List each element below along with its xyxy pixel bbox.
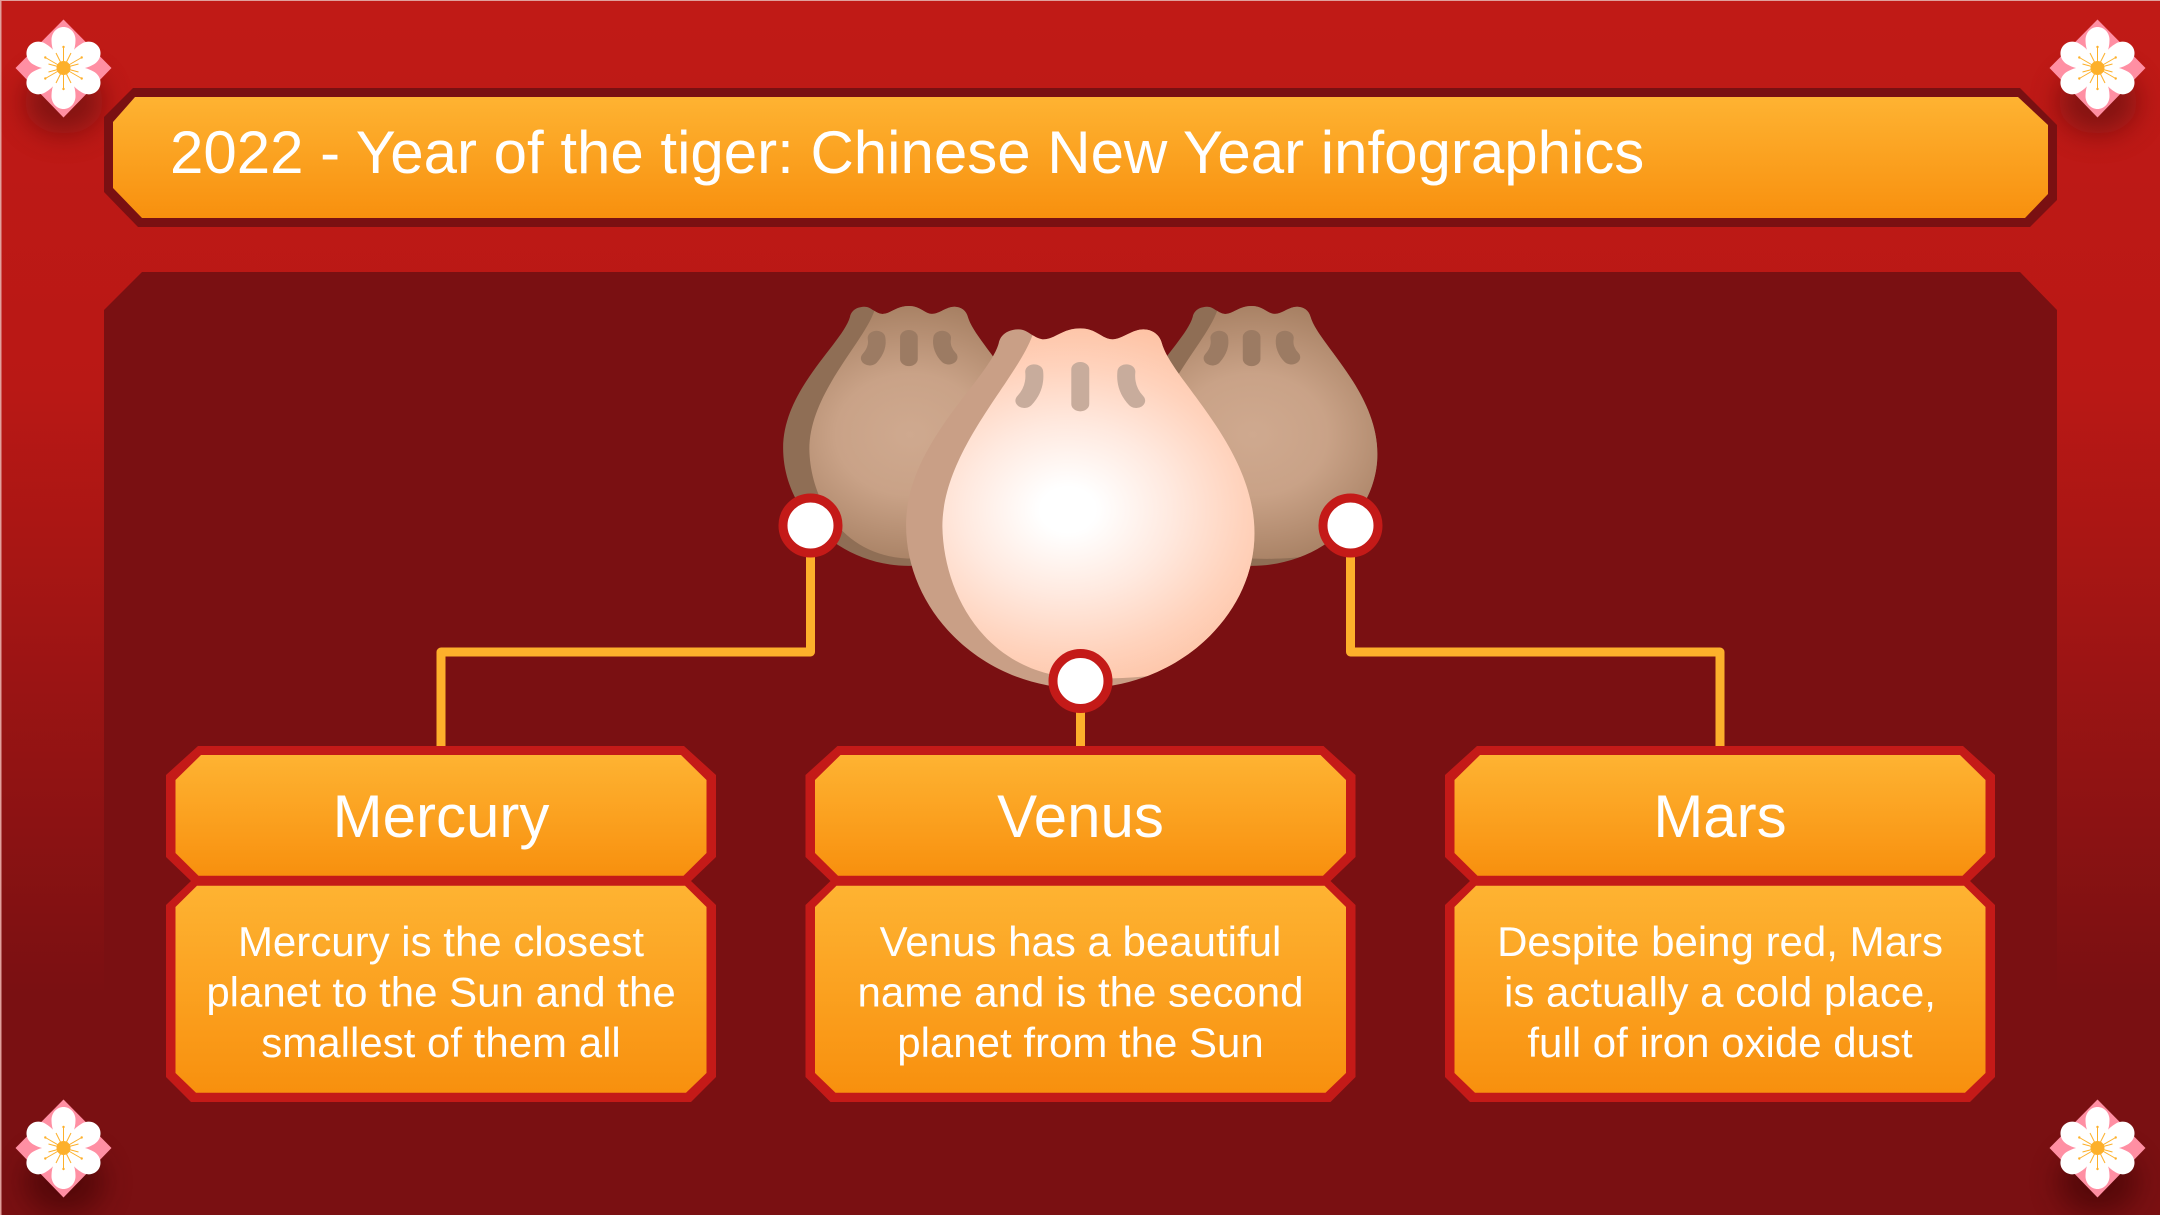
icon: flower bottom left xyxy=(16,1100,112,1198)
shadow: bottom right flower xyxy=(2058,1150,2138,1214)
card: Mercury xyxy=(166,746,716,1102)
card: Mars xyxy=(1445,746,1995,1102)
title: 2022 - Year of the tiger: Chinese New Year infographics xyxy=(170,119,1644,186)
dumpling illustration xyxy=(783,295,1403,688)
text: Mars description: Despite being red, Mars xyxy=(1497,918,1943,965)
icon: flower top left xyxy=(16,20,112,118)
text: Mercury description: smallest of them all xyxy=(261,1019,621,1066)
icon: left dumpling xyxy=(783,306,993,566)
text: Mars description: full of iron oxide dust xyxy=(1527,1019,1913,1066)
heading: Mars: Mars xyxy=(1653,783,1787,850)
text: Mars description: is actually a cold place, xyxy=(1504,968,1936,1016)
shadow: top right flower xyxy=(2058,70,2138,134)
icon: right dumpling xyxy=(1167,306,1378,566)
text: Venus description: name and is the second xyxy=(858,968,1303,1016)
shadow: top left flower xyxy=(24,70,104,134)
text: Venus description: planet from the Sun xyxy=(897,1019,1264,1066)
connector: Venus xyxy=(1076,700,1085,750)
marker: left dumpling xyxy=(783,498,838,553)
text: Venus description: Venus has a beautiful xyxy=(880,918,1281,965)
panel: dark content area xyxy=(104,272,2057,1215)
text: Mercury description: planet to the Sun and the xyxy=(206,968,676,1016)
icon: flower bottom right xyxy=(2050,1100,2146,1198)
text: Mercury description: Mercury is the closest xyxy=(238,918,644,965)
card: Venus xyxy=(806,746,1356,1102)
heading: Venus: Venus xyxy=(997,783,1164,850)
marker: center dumpling xyxy=(1053,654,1108,708)
icon: center dumpling xyxy=(906,328,1254,686)
title banner xyxy=(104,88,2057,227)
connector: Mars xyxy=(1350,550,1720,750)
marker: right dumpling xyxy=(1323,498,1378,553)
connector: Mercury xyxy=(441,550,810,750)
icon: flower top right xyxy=(2050,20,2146,118)
shadow: bottom left flower xyxy=(24,1150,104,1214)
heading: Mercury: Mercury xyxy=(333,783,549,850)
